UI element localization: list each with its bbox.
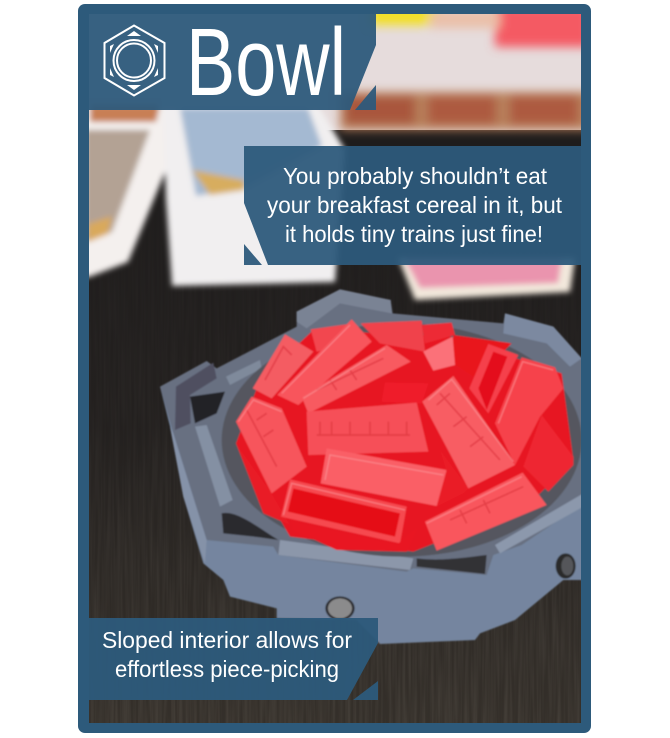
- infographic card: [78, 4, 591, 733]
- banner shape: [89, 14, 376, 110]
- callout: cereal: [244, 146, 581, 265]
- callout text: effortless piece-picking: [115, 656, 339, 682]
- callout text: your breakfast cereal in it, but: [267, 192, 563, 218]
- title: Bowl: [186, 9, 346, 116]
- callout shape: [89, 618, 378, 700]
- bowl body: [160, 289, 583, 644]
- title banner: [89, 9, 376, 116]
- callout text: [102, 627, 352, 682]
- photo: [80, 5, 590, 723]
- table surface: [89, 14, 581, 723]
- callout text: You probably shouldn’t eat: [283, 163, 548, 189]
- bowl holding red train pieces: [160, 289, 583, 644]
- callout text: Sloped interior allows for: [102, 627, 352, 653]
- callout text: it holds tiny trains just fine!: [285, 221, 543, 247]
- callout: sloped interior: [89, 618, 378, 700]
- bowl interior: [190, 323, 582, 574]
- card border: [78, 4, 591, 733]
- callout text: [267, 163, 563, 247]
- blurred background cards: [80, 5, 590, 300]
- icon: hexagonal bowl: [104, 26, 164, 96]
- train pieces: [236, 319, 573, 552]
- callout shape: [244, 146, 581, 265]
